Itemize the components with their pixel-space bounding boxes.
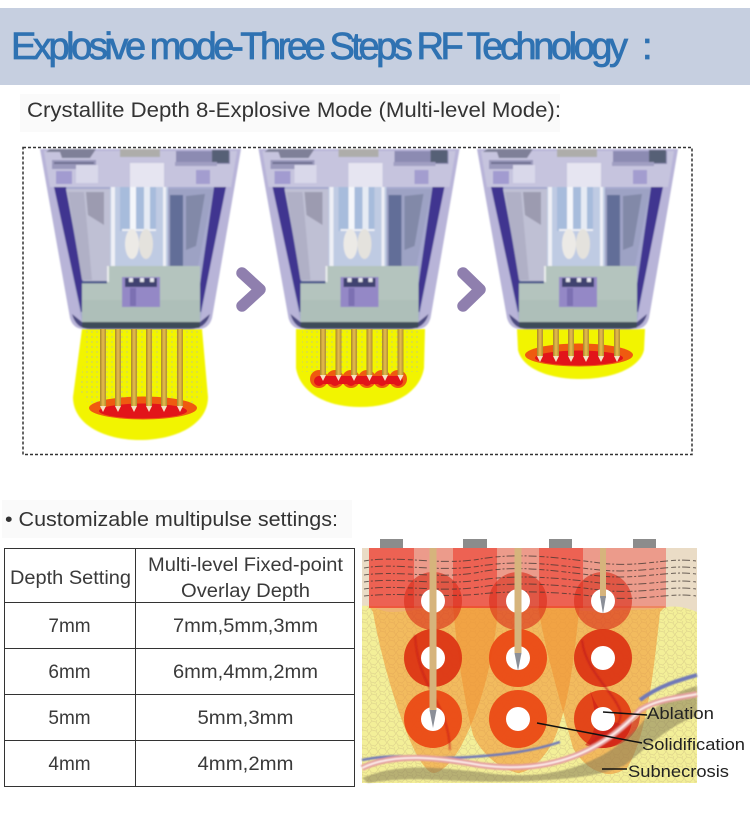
heading: crystallite depth bbox=[20, 94, 561, 132]
chart: skin cross-section with treatment zones bbox=[362, 539, 745, 783]
table row: 4mm: 4mm,2mm bbox=[198, 754, 294, 775]
table header bbox=[10, 555, 344, 602]
treatment needles bbox=[430, 548, 606, 728]
label: subnecrosis: Subnecrosis bbox=[628, 763, 729, 781]
arrow: step 1 to step 2 bbox=[242, 273, 260, 306]
electrode tabs bbox=[380, 539, 656, 548]
title banner: Explosive mode-Three Steps RF Technology bbox=[11, 26, 628, 68]
table header: Multi-level Fixed-point bbox=[148, 555, 344, 576]
heading: customizable multipulse settings: • Customizable multipulse settings: bbox=[5, 508, 338, 531]
label: solidification: Solidification bbox=[642, 736, 745, 754]
subnecrosis orange zones bbox=[369, 606, 666, 774]
dermis texture lines bbox=[364, 556, 696, 598]
table row: 7mm bbox=[48, 616, 318, 637]
ablation centres bbox=[421, 589, 615, 731]
step 2 cartridge bbox=[258, 149, 460, 407]
title banner bbox=[0, 8, 750, 85]
skin tissue base bbox=[362, 548, 697, 783]
blood vessels bbox=[362, 635, 697, 783]
label: ablation bbox=[603, 705, 714, 723]
heading: customizable multipulse settings bbox=[2, 500, 352, 538]
table row: 4mm bbox=[48, 754, 294, 775]
table row: 7mm: 7mm bbox=[48, 616, 91, 637]
table row: 6mm: 6mm,4mm,2mm bbox=[173, 662, 318, 683]
solidification rings bbox=[404, 572, 640, 748]
table header: Overlay Depth bbox=[181, 581, 310, 602]
table row: 4mm: 4mm bbox=[48, 754, 91, 775]
table row: 5mm bbox=[48, 708, 294, 729]
table: depth settings bbox=[4, 548, 354, 786]
table row: 6mm bbox=[48, 662, 318, 683]
red top band bbox=[369, 548, 666, 608]
heading: crystallite depth: Crystallite Depth 8-Explosive Mode (Multi-level Mode): bbox=[27, 98, 561, 122]
title banner: : bbox=[642, 26, 653, 68]
label: ablation: Ablation bbox=[647, 705, 714, 723]
arrow: step 2 to step 3 bbox=[463, 273, 480, 306]
table row: 5mm: 5mm,3mm bbox=[198, 708, 294, 729]
table row: 5mm: 5mm bbox=[48, 708, 91, 729]
step 1 cartridge bbox=[40, 149, 241, 440]
table header: Depth Setting bbox=[10, 568, 131, 589]
table row: 6mm: 6mm bbox=[48, 662, 91, 683]
table row: 7mm: 7mm,5mm,3mm bbox=[173, 616, 318, 637]
step 3 cartridge bbox=[477, 149, 678, 379]
panel: three step cartridge diagram bbox=[23, 148, 692, 454]
label: solidification bbox=[537, 723, 745, 754]
